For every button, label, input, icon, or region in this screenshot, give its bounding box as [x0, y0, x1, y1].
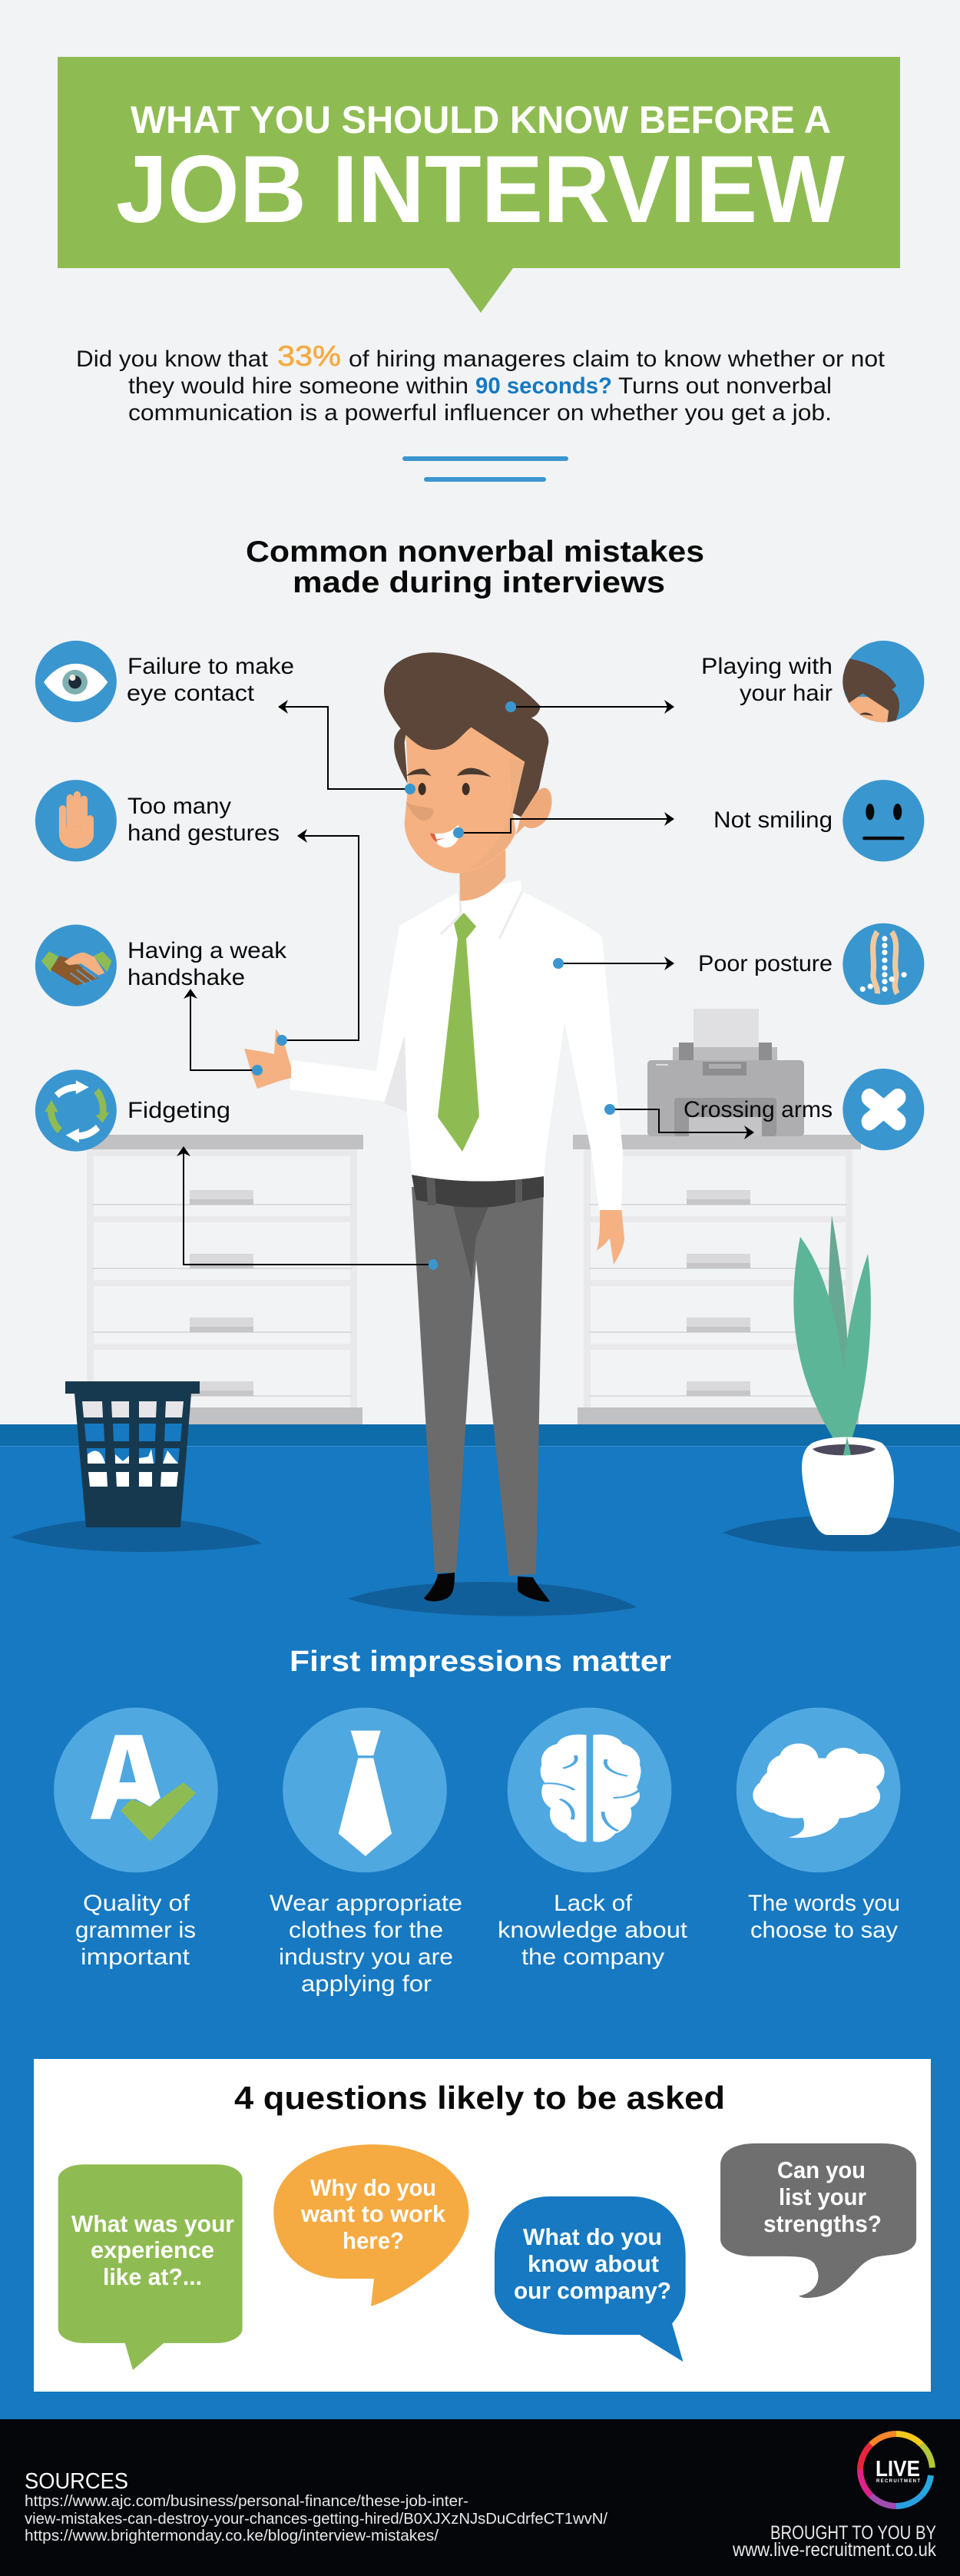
- bubble: blue: our company?: [514, 2277, 671, 2304]
- waste bin: [11, 1381, 262, 1552]
- labels: left mistakes: [127, 654, 294, 1123]
- callout arrow: posture: [553, 956, 674, 970]
- icon: grammar A with tick: [54, 1708, 218, 1872]
- labels: right mistakes: Crossing arms: [684, 1097, 833, 1122]
- source links: https://www.ajc.com/business/personal-finance/these-job-inter-: [25, 2493, 468, 2510]
- title banner: [58, 57, 900, 313]
- caption: words: The words you: [748, 1891, 900, 1916]
- bubble: blue: What do you: [523, 2223, 662, 2250]
- caption: clothes: [270, 1891, 462, 1997]
- caption: clothes: clothes for the: [289, 1918, 443, 1943]
- icon: hair: [841, 641, 924, 724]
- caption: knowledge: Lack of: [554, 1891, 633, 1916]
- icon: cross: [842, 1069, 924, 1150]
- bubble: grey: Can you: [777, 2157, 866, 2183]
- questions heading: 4 questions likely to be asked: [234, 2080, 725, 2116]
- callout arrow: fidgeting: [177, 1146, 438, 1270]
- man: floor shadow: [348, 1582, 637, 1616]
- labels: right mistakes: your hair: [740, 681, 833, 706]
- labels: left mistakes: eye contact: [127, 681, 255, 706]
- icon: brain: [508, 1708, 671, 1872]
- bubble: blue: know about: [528, 2250, 659, 2277]
- bubble: orange: Why do you: [310, 2174, 436, 2201]
- caption: grammar: grammer is: [75, 1918, 196, 1943]
- man: right hand: [597, 1208, 624, 1265]
- callout arrow: handshake: [184, 989, 263, 1076]
- man: head: [384, 652, 552, 901]
- caption: knowledge: [498, 1891, 688, 1970]
- panel: questions: [34, 2059, 931, 2392]
- icon: fidget arrows: [35, 1069, 117, 1152]
- caption: clothes: Wear appropriate: [270, 1891, 462, 1916]
- source links: view-mistakes-can-destroy-your-chances-getting-hired/B0XJXzNJsDuCdrfeCT1wvN/: [25, 2511, 607, 2528]
- bubble: green: [58, 2164, 243, 2370]
- right filing cabinet: [573, 1135, 861, 1424]
- labels: left mistakes: Having a weak: [127, 938, 287, 963]
- section heading: nonverbal mistakes: [246, 535, 704, 599]
- icon: spine: [842, 923, 924, 1005]
- icon: eye: [35, 641, 117, 722]
- man figure: [244, 652, 637, 1616]
- section heading: nonverbal mistakes: made during interviews: [293, 566, 665, 599]
- labels: left mistakes: Fidgeting: [127, 1098, 230, 1123]
- intro paragraph: communication is a powerful influencer on whether you get a job.: [128, 400, 832, 426]
- intro paragraph: [76, 340, 885, 426]
- bubble: grey: strengths?: [763, 2210, 882, 2237]
- caption: clothes: applying for: [301, 1971, 432, 1997]
- icon: handshake: [35, 925, 117, 1006]
- bubble: orange: want to work: [300, 2200, 446, 2227]
- icon: neutral face: [842, 780, 924, 861]
- caption: grammar: Quality of: [83, 1891, 190, 1916]
- footer: [0, 2419, 960, 2576]
- intro paragraph: they would hire someone within: [128, 373, 468, 399]
- bubble: green: What was your: [71, 2210, 234, 2237]
- potted plant: [723, 1215, 960, 1552]
- man: left hand: [244, 1029, 291, 1089]
- left filing cabinet: [83, 1135, 363, 1424]
- icon: speech cloud: [737, 1708, 900, 1872]
- bubble: orange: here?: [343, 2227, 404, 2254]
- icon: raised hand: [35, 780, 117, 861]
- bubble: blue: [495, 2196, 686, 2362]
- section heading: nonverbal mistakes: Common nonverbal mistakes: [246, 535, 704, 569]
- callout arrow: eye contact: [278, 700, 415, 794]
- logo: Live Recruitment: RECRUITMENT: [876, 2479, 920, 2484]
- caption: grammar: important: [81, 1944, 190, 1970]
- bubble: orange: [273, 2144, 469, 2306]
- man: shirt: [290, 880, 623, 1210]
- labels: right mistakes: Playing with: [701, 654, 833, 679]
- caption: grammar: [75, 1891, 196, 1970]
- man: tie: [438, 913, 479, 1152]
- title line 2: JOB INTERVIEW: [116, 137, 845, 243]
- man: collar: [441, 891, 522, 939]
- labels: right mistakes: [684, 654, 833, 1122]
- caption: clothes: industry you are: [279, 1944, 453, 1970]
- brought to you by: www.live-recruitment.co.uk: [732, 2539, 936, 2561]
- labels: right mistakes: Not smiling: [713, 807, 833, 833]
- intro paragraph: 33%: [277, 340, 341, 372]
- labels: left mistakes: Failure to make: [127, 654, 294, 679]
- caption: words: [748, 1891, 900, 1943]
- bubble: green: like at?...: [103, 2263, 202, 2290]
- bubble: grey: [720, 2143, 916, 2298]
- intro paragraph: Did you know that: [76, 346, 268, 372]
- source links: https://www.brightermonday.co.ke/blog/interview-mistakes/: [25, 2528, 439, 2545]
- logo: Live Recruitment: LIVE: [876, 2457, 920, 2482]
- logo: Live Recruitment: [860, 2434, 932, 2506]
- bubble: green: experience: [91, 2236, 214, 2263]
- bubble: grey: list your: [779, 2183, 866, 2210]
- callout arrow: crossing arms: [604, 1104, 754, 1139]
- intro paragraph: Turns out nonverbal: [618, 373, 832, 399]
- section heading: first impressions: First impressions matter: [290, 1646, 671, 1678]
- caption: knowledge: knowledge about: [498, 1918, 688, 1943]
- caption: knowledge: the company: [521, 1944, 664, 1970]
- intro paragraph: 90 seconds?: [475, 373, 612, 399]
- labels: left mistakes: handshake: [127, 965, 245, 990]
- icon: necktie: [283, 1708, 447, 1872]
- man: trousers: [412, 1179, 544, 1576]
- man: shoes: [424, 1573, 550, 1602]
- callout arrow: not smiling: [453, 812, 674, 838]
- callout arrow: hand gestures: [276, 829, 359, 1046]
- printer: [647, 1009, 804, 1136]
- title line 1: WHAT YOU SHOULD KNOW BEFORE A: [131, 98, 831, 141]
- labels: left mistakes: Too many: [127, 794, 231, 819]
- brought to you by: [732, 2522, 936, 2561]
- sources heading: SOURCES: [25, 2469, 128, 2494]
- floor: [0, 1424, 960, 2419]
- labels: right mistakes: Poor posture: [698, 951, 833, 976]
- caption: words: choose to say: [750, 1918, 898, 1943]
- labels: left mistakes: hand gestures: [127, 821, 280, 846]
- intro paragraph: of hiring manageres claim to know whether or not: [349, 346, 885, 372]
- source links: [25, 2493, 607, 2545]
- man: belt: [412, 1175, 544, 1208]
- callout arrow: hair: [505, 700, 674, 714]
